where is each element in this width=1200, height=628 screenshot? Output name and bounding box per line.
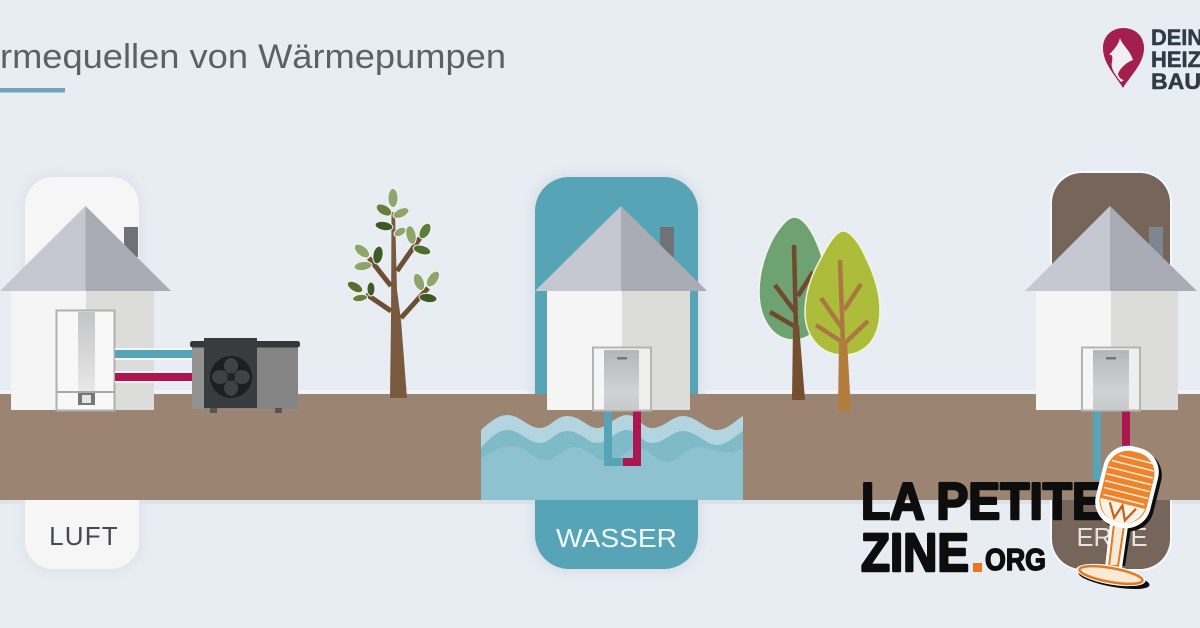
- roof: [0, 206, 171, 291]
- trunk and branches: [366, 212, 428, 398]
- La Petite Zine wordmark: [861, 473, 1104, 583]
- La Petite Zine wordmark: LA PETITE: [861, 473, 1104, 531]
- chimney: [124, 227, 138, 257]
- water with waves: [481, 415, 743, 500]
- indoor unit: [56, 310, 115, 410]
- leaves: [345, 188, 442, 304]
- pipes: Luft: [115, 348, 192, 383]
- logo text: BAU: [1151, 69, 1200, 94]
- icon: flame pin: [1103, 28, 1144, 88]
- ground band: [0, 394, 1200, 500]
- mic stand: [1075, 522, 1147, 590]
- heat pump unit: Wasser: [593, 348, 651, 410]
- roof: [1025, 206, 1197, 291]
- logo text: [1151, 25, 1200, 94]
- chimney: [1149, 227, 1163, 257]
- walls: [547, 291, 690, 410]
- green tree: [759, 217, 828, 400]
- house: Wasser: [535, 206, 707, 410]
- ground highlight strips: [0, 390, 1200, 504]
- house: Erde: [1025, 206, 1197, 410]
- orange dot: [973, 563, 982, 572]
- Luft label: LUFT: [49, 521, 119, 551]
- mic head: [1090, 440, 1164, 534]
- mic shadow: [1077, 443, 1167, 593]
- title underline: [0, 88, 65, 92]
- yellow tree: [805, 231, 880, 411]
- fan: [210, 356, 252, 398]
- tree: young tree with leaves: [345, 188, 442, 398]
- panel: Luft pill: [21, 173, 143, 573]
- icon: retro microphone: [1075, 440, 1167, 593]
- logo: Dein Heizungsbauer: [1103, 25, 1200, 94]
- outdoor heat pump unit: [190, 338, 300, 413]
- walls: [1036, 291, 1178, 410]
- panel: Erde pill: [1050, 171, 1172, 571]
- pipes: Erde: [1093, 410, 1130, 480]
- La Petite Zine wordmark: ORG: [985, 542, 1046, 577]
- pipes: Wasser: [608, 410, 637, 462]
- Erde label: ERDE: [1076, 522, 1148, 552]
- roof: [535, 206, 707, 291]
- trees: green and yellow pair: [759, 217, 880, 411]
- heat pump unit: Erde: [1082, 348, 1140, 410]
- title: rmequellen von Wärmepumpen: [0, 38, 506, 76]
- chimney: [660, 227, 674, 257]
- house: Luft: [0, 206, 171, 410]
- Wasser label: WASSER: [556, 523, 677, 553]
- logo text: HEIZ: [1151, 47, 1200, 72]
- panel: Wasser pill: [531, 173, 702, 573]
- walls: [11, 291, 154, 410]
- La Petite Zine wordmark: ZINE: [861, 523, 969, 583]
